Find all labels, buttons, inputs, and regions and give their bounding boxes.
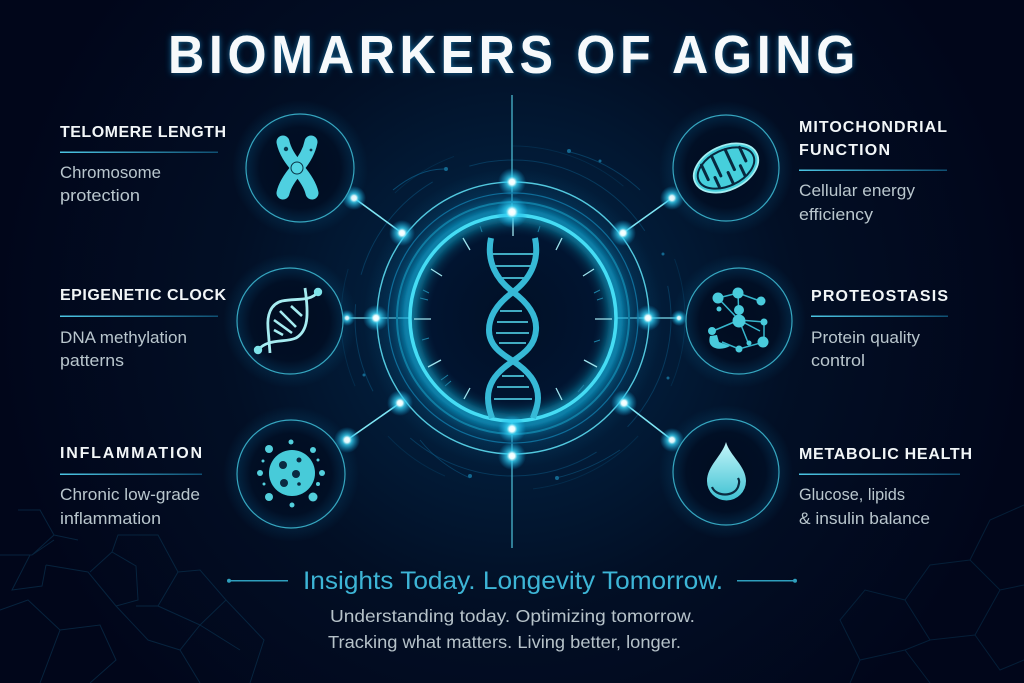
title: BIOMARKERS OF AGING	[168, 25, 855, 85]
label: inflammation: inflammation	[60, 510, 161, 528]
label: inflammation: Chronic low-grade	[60, 486, 200, 504]
label: epigenetic clock: patterns	[60, 352, 124, 370]
footer text: Understanding today. Optimizing tomorrow.	[330, 606, 695, 626]
label: inflammation	[60, 445, 202, 528]
label: proteostasis: PROTEOSTASIS	[811, 288, 948, 305]
footer text: Tracking what matters. Living better, longer.	[328, 632, 681, 652]
label: proteostasis	[811, 288, 948, 370]
label: metabolic health: METABOLIC HEALTH	[799, 446, 972, 463]
label: metabolic health: & insulin balance	[799, 510, 930, 528]
footer text	[328, 606, 695, 652]
icon: drop	[659, 405, 793, 539]
icon: protein network	[672, 254, 806, 388]
outer rings	[377, 182, 649, 454]
DNA helix	[488, 238, 538, 418]
title: BIOMARKERS OF AGING	[168, 25, 855, 85]
hexagon pattern: bottom right	[840, 505, 1024, 683]
icon: mitochondrion	[659, 101, 793, 235]
label: proteostasis: Protein quality	[811, 329, 921, 347]
faint orbit arcs and data points	[341, 146, 685, 490]
hexagon pattern: bottom left	[0, 510, 264, 683]
label: epigenetic clock: EPIGENETIC CLOCK	[60, 287, 226, 304]
icon: chromosome	[232, 100, 368, 236]
main glowing ring	[410, 215, 616, 421]
label: proteostasis: control	[811, 352, 865, 370]
clock ticks	[414, 218, 612, 400]
central clock with DNA	[363, 168, 663, 468]
label: telomere length: TELOMERE LENGTH	[60, 124, 226, 141]
tagline: Insights Today. Longevity Tomorrow.	[303, 567, 723, 595]
label: epigenetic clock	[60, 287, 226, 370]
icon: inflammation cell	[223, 406, 359, 542]
label: telomere length: protection	[60, 187, 140, 205]
label: mitochondrial function: FUNCTION	[799, 142, 890, 159]
label: epigenetic clock: DNA methylation	[60, 329, 187, 347]
clock face	[410, 215, 616, 421]
label: telomere length: Chromosome	[60, 164, 161, 182]
connector lines	[346, 95, 680, 548]
icon: DNA methylation	[223, 254, 357, 388]
label: metabolic health	[799, 446, 972, 528]
glowing nodes	[334, 168, 687, 470]
label: metabolic health: Glucose, lipids	[799, 486, 905, 504]
label: mitochondrial function: MITOCHONDRIAL	[799, 119, 947, 136]
label: mitochondrial function: Cellular energy	[799, 182, 916, 200]
label: mitochondrial function	[799, 119, 947, 224]
label: inflammation: INFLAMMATION	[60, 445, 202, 462]
label: mitochondrial function: efficiency	[799, 206, 874, 224]
clock halo	[363, 168, 663, 468]
label: telomere length	[60, 124, 226, 205]
